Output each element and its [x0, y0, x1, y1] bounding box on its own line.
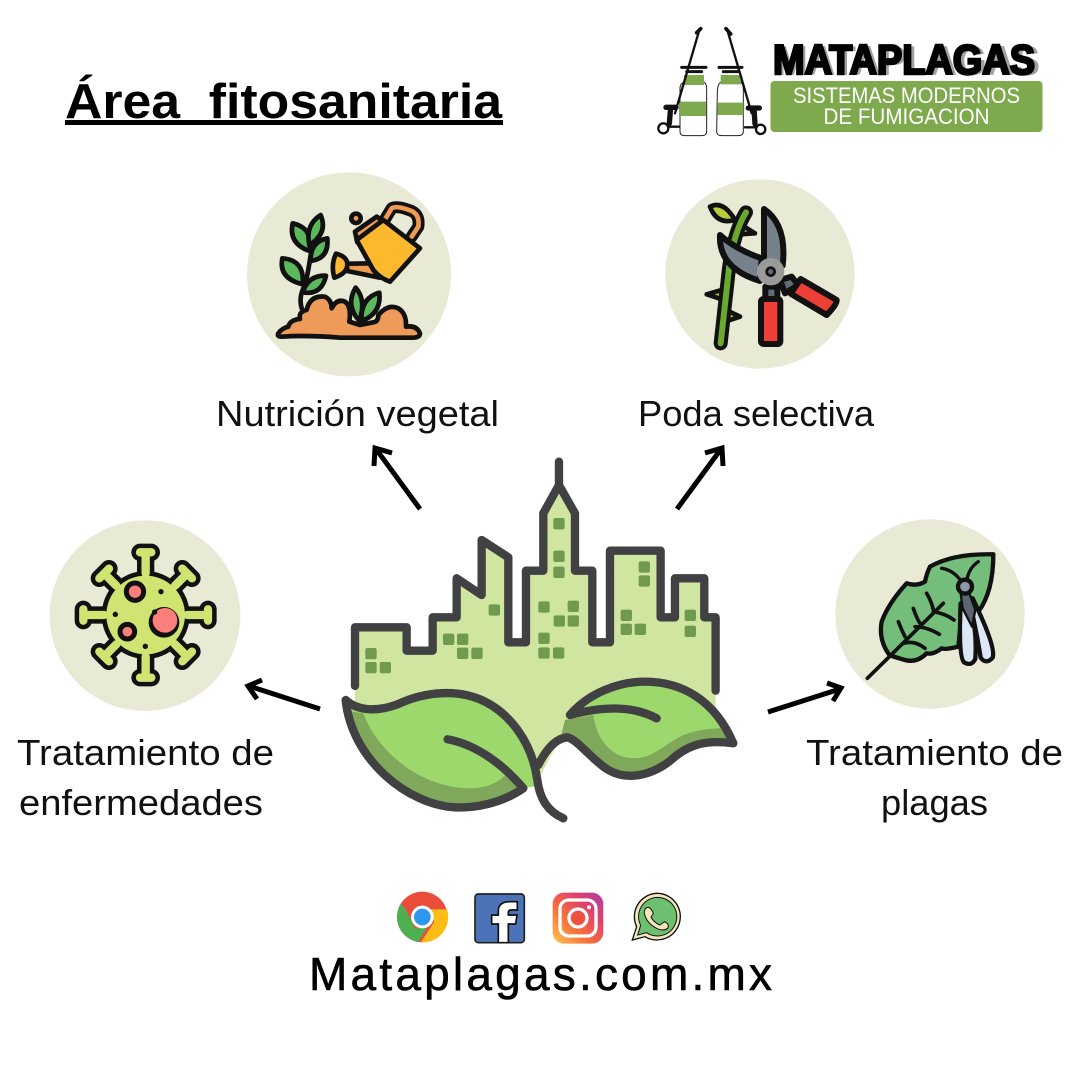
icon: facebook	[475, 894, 524, 943]
label: Tratamiento de enfermedades	[17, 732, 274, 823]
panel: Poda selectiva	[638, 179, 875, 434]
logo banner: DE FUMIGACION	[824, 104, 990, 129]
social icons	[397, 892, 680, 944]
arrow: to Poda selectiva	[677, 448, 723, 509]
arrow: to Tratamiento de plagas	[768, 683, 841, 712]
central illustration: green city with leaves	[346, 462, 733, 818]
logo banner: SISTEMAS MODERNOS	[793, 83, 1020, 108]
panel: Tratamiento de plagas	[806, 519, 1063, 823]
logo wordmark: MATAPLAGAS	[776, 37, 1040, 84]
icon: virus	[50, 520, 240, 711]
panel: Tratamiento de enfermedades	[17, 520, 274, 823]
city windows	[365, 518, 696, 673]
label: Tratamiento de enfermedades: enfermedades	[19, 782, 263, 823]
icon: whatsapp	[632, 893, 680, 940]
arrow: to Tratamiento de enfermedades	[248, 680, 320, 709]
left leaf	[346, 693, 563, 818]
icon: instagram	[553, 893, 603, 944]
label: Tratamiento de plagas: Tratamiento de	[806, 732, 1063, 773]
city fill	[355, 485, 716, 785]
city outline	[355, 462, 716, 691]
logo: Mataplagas	[658, 29, 1042, 136]
website address: Mataplagas.com.mx	[309, 948, 772, 1000]
title: Área fitosanitaria	[65, 75, 503, 129]
label: Nutrición vegetal: Nutrición vegetal	[216, 393, 499, 434]
logo banner	[770, 81, 1042, 132]
label: Tratamiento de enfermedades: Tratamiento de	[17, 732, 274, 773]
icon: chrome	[397, 892, 448, 942]
icon: watering can and plants	[247, 172, 451, 376]
label: Tratamiento de plagas	[806, 732, 1063, 823]
right leaf	[538, 682, 733, 776]
logo wordmark front: MATAPLAGAS	[773, 36, 1035, 83]
panel: Nutrición vegetal	[216, 172, 499, 434]
label: Poda selectiva: Poda selectiva	[638, 393, 875, 434]
label: Tratamiento de plagas: plagas	[881, 782, 988, 823]
icon: sprayers	[658, 29, 765, 136]
icon: pruning shears and stem	[665, 179, 855, 369]
arrow: to Nutrición vegetal	[374, 448, 420, 509]
icon: bitten leaf and insect	[835, 519, 1025, 709]
